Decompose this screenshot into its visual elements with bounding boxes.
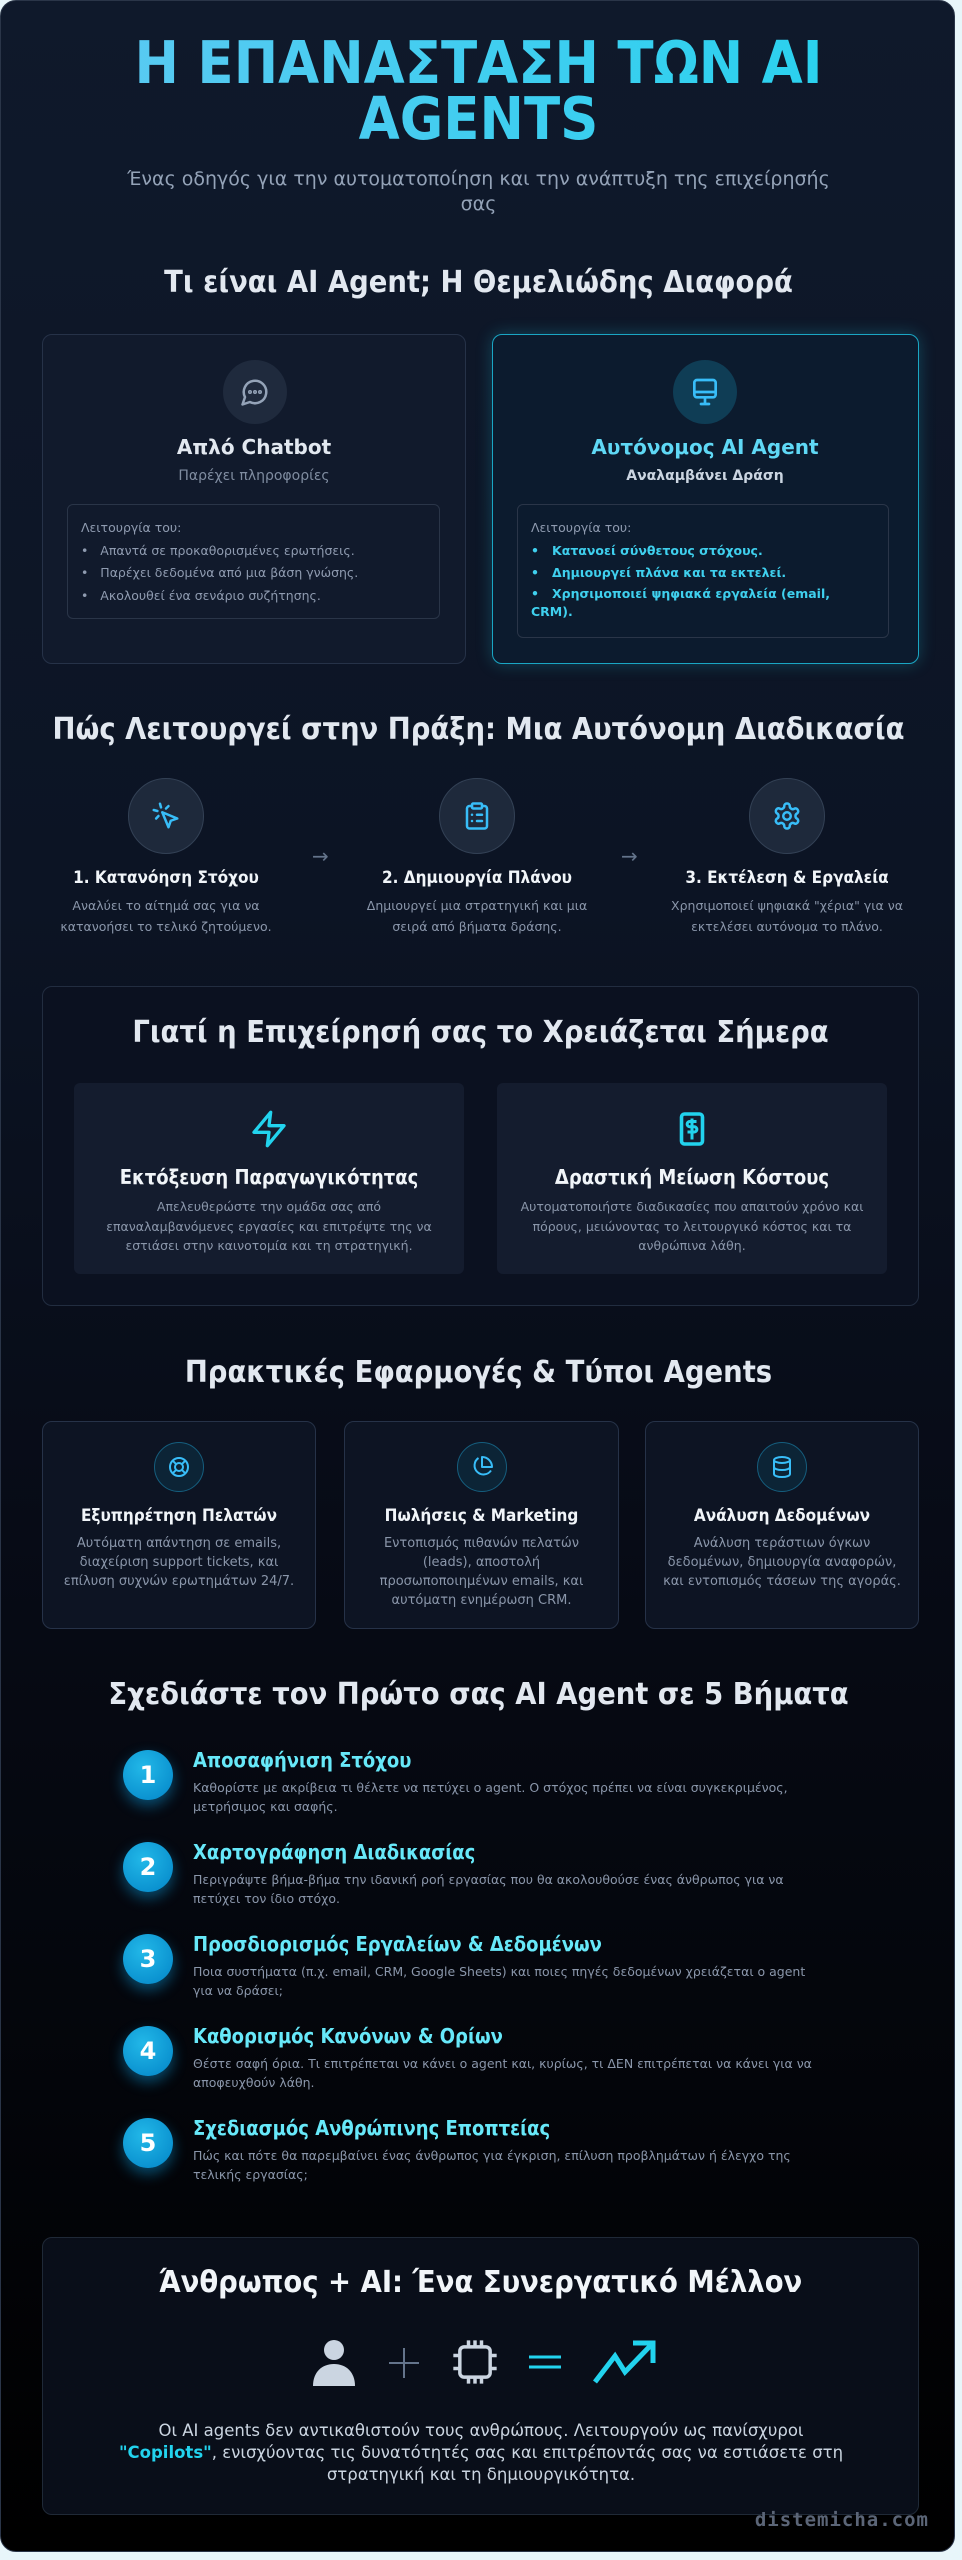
step 4: Καθορισμός Κανόνων & Ορίων	[193, 2024, 503, 2048]
icon: cursor click	[128, 778, 204, 854]
text: Εντοπισμός πιθανών πελατών (leads), αποστολή προσωποποιημένων emails, και αυτόματη ενημέρωση CRM.	[380, 1536, 583, 1608]
icon: monitor	[673, 360, 737, 424]
text: Αυτοματοποιήστε διαδικασίες που απαιτούν χρόνο και πόρους, μειώνοντας το λειτουργικό κόστος και τα ανθρώπινα λάθη.	[521, 1199, 863, 1253]
steps list	[115, 1748, 812, 2182]
functions box	[517, 504, 889, 638]
icon: equals	[529, 2356, 561, 2368]
step 5: Πώς και πότε θα παρεμβαίνει ένας άνθρωπος για έγκριση, επίλυση προβλημάτων ή έλεγχο της τελικής εργασίας;	[193, 2148, 791, 2182]
step 2	[366, 778, 587, 934]
step title: 1. Κατανόηση Στόχου	[73, 868, 259, 888]
icon: money	[680, 1112, 704, 1146]
icon: gear	[749, 778, 825, 854]
heading: Γιατί η Επιχείρησή σας το Χρειάζεται Σήμερα	[132, 1015, 829, 1050]
title: Δραστική Μείωση Κόστους	[555, 1165, 829, 1189]
closing text: Οι AI agents δεν αντικαθιστούν τους ανθρώπους. Λειτουργούν ως πανίσχυροι	[158, 2421, 804, 2440]
icon: chat	[223, 360, 287, 424]
closing text	[119, 2421, 843, 2484]
icon: plus	[389, 2348, 419, 2378]
step 5: Σχεδιασμός Ανθρώπινης Εποπτείας	[193, 2116, 550, 2140]
icon: pie chart	[457, 1442, 507, 1492]
step 3: για να δράσει;	[193, 1983, 283, 1998]
heading: Άνθρωπος + AI: Ένα Συνεργατικό Μέλλον	[159, 2265, 802, 2300]
icon: database	[757, 1442, 807, 1492]
step text: Δημιουργεί μια στρατηγική και μια σειρά από βήματα δράσης.	[367, 898, 587, 934]
card title: Αυτόνομος AI Agent	[591, 435, 819, 459]
panel: human + AI	[42, 2237, 919, 2515]
heading: applications: Πρακτικές Εφαρμογές & Τύποι Agents	[185, 1355, 772, 1390]
step 1: 1	[140, 1761, 156, 1789]
text: δεδομένων, δημιουργία αναφορών, και εντοπισμός τάσεων της αγοράς.	[663, 1555, 901, 1589]
step 2: Χαρτογράφηση Διαδικασίας	[193, 1840, 475, 1864]
subtitle: Ένας οδηγός για την αυτοματοποίηση και την ανάπτυξη της επιχείρησής σας	[127, 168, 830, 215]
step 3: Προσδιορισμός Εργαλείων & Δεδομένων	[193, 1932, 602, 1956]
closing text: στρατηγική και τη δημιουργικότητα.	[327, 2465, 635, 2484]
benefit: cost	[497, 1083, 887, 1274]
panel: autonomous AI agent	[492, 334, 919, 664]
step 3: 3	[140, 1945, 156, 1973]
icon: lifebuoy	[154, 1442, 204, 1492]
title: Εκτόξευση Παραγωγικότητας	[120, 1165, 418, 1189]
watermark: distemicha.com	[755, 2509, 929, 2531]
step 2	[115, 1840, 784, 1906]
step 2: Περιγράψτε βήμα-βήμα την ιδανική ροή εργασίας που θα ακολουθούσε ένας άνθρωπος για να πετύχει τον ίδιο στόχο.	[193, 1872, 784, 1906]
step 1	[60, 778, 272, 934]
title: Ανάλυση Δεδομένων	[694, 1506, 870, 1526]
functions box: • Ακολουθεί ένα σενάριο συζήτησης.	[81, 588, 321, 602]
icon: clipboard	[439, 778, 515, 854]
text: Αυτόματη απάντηση σε emails, διαχείριση support tickets, και επίλυση συχνών ερωτημάτων 24/7.	[64, 1536, 294, 1589]
step 5: 5	[140, 2129, 156, 2157]
text	[663, 1536, 901, 1589]
step 3	[671, 778, 903, 934]
title: Η ΕΠΑΝΑΣΤΑΣΗ ΤΩΝ AI	[135, 28, 822, 97]
step 1: Αποσαφήνιση Στόχου	[193, 1748, 411, 1772]
step 1	[115, 1748, 788, 1814]
functions box: Λειτουργία του:	[81, 520, 181, 535]
title	[1, 35, 956, 147]
icon: lightning	[252, 1110, 286, 1148]
card title: Απλό Chatbot	[177, 435, 331, 459]
equation icons	[313, 2340, 656, 2386]
panel: why your business needs it	[42, 986, 919, 1306]
step title: 2. Δημιουργία Πλάνου	[382, 868, 572, 888]
benefit: productivity	[74, 1083, 464, 1274]
title: AGENTS	[359, 84, 598, 153]
app card: sales	[344, 1421, 619, 1629]
heading: 5 steps: Σχεδιάστε τον Πρώτο σας AI Agent σε 5 Βήματα	[108, 1677, 849, 1712]
step 4: Θέστε σαφή όρια. Τι επιτρέπεται να κάνει ο agent και, κυρίως, τι ΔΕΝ επιτρέπεται να κάνει για να αποφευχθούν λάθη.	[193, 2056, 812, 2090]
text: Ανάλυση τεράστιων όγκων	[694, 1536, 870, 1551]
icon: trend up	[593, 2340, 656, 2384]
icon: person	[313, 2340, 355, 2386]
step title: 3. Εκτέλεση & Εργαλεία	[685, 868, 889, 888]
step 5	[115, 2116, 791, 2182]
functions box: • Δημιουργεί πλάνα και τα εκτελεί.	[531, 565, 786, 580]
functions box: • Απαντά σε προκαθορισμένες ερωτήσεις.	[81, 542, 355, 558]
step 2: 2	[140, 1853, 156, 1881]
step 3: Ποια συστήματα (π.χ. email, CRM, Google Sheets) και ποιες πηγές δεδομένων χρειάζεται ο agent	[193, 1964, 805, 1979]
step 3	[115, 1932, 805, 1998]
closing text: "Copilots", ενισχύοντας τις δυνατότητές σας και επιτρέποντάς σας να εστιάσετε στη	[119, 2443, 843, 2462]
title: Εξυπηρέτηση Πελατών	[81, 1506, 277, 1526]
step text: Αναλύει το αίτημά σας για να κατανοήσει το τελικό ζητούμενο.	[60, 898, 272, 934]
title: Πωλήσεις & Marketing	[385, 1506, 578, 1526]
icon: chip	[453, 2340, 497, 2384]
step 4: 4	[140, 2037, 156, 2065]
card subtitle: Αναλαμβάνει Δράση	[626, 468, 784, 484]
app card: customer service	[42, 1421, 316, 1629]
step text: Χρησιμοποιεί ψηφιακά "χέρια" για να εκτελέσει αυτόνομα το πλάνο.	[671, 898, 903, 934]
functions box	[67, 504, 440, 619]
functions box: • Χρησιμοποιεί ψηφιακά εργαλεία (email, CRM).	[531, 586, 830, 618]
functions box: • Κατανοεί σύνθετους στόχους.	[531, 542, 763, 558]
functions box: Λειτουργία του:	[531, 520, 631, 535]
app card: data analysis	[645, 1421, 919, 1629]
panel: simple chatbot	[42, 334, 466, 664]
card subtitle: Παρέχει πληροφορίες	[178, 468, 330, 484]
arrow 1: →	[312, 844, 329, 868]
text: Απελευθερώστε την ομάδα σας από επαναλαμβανόμενες εργασίες και επιτρέψτε της να εστιάσει στην καινοτομία και τη στρατηγική.	[106, 1199, 432, 1253]
step 4	[115, 2024, 812, 2090]
arrow 2: →	[621, 844, 638, 868]
step 1: Καθορίστε με ακρίβεια τι θέλετε να πετύχει ο agent. Ο στόχος πρέπει να είναι συγκεκριμένος, μετρήσιμος και σαφής.	[193, 1780, 788, 1814]
functions box: • Παρέχει δεδομένα από μια βάση γνώσης.	[81, 565, 358, 580]
heading: how it works: Πώς Λειτουργεί στην Πράξη: Μια Αυτόνομη Διαδικασία	[53, 712, 904, 747]
heading: what is AI agent: Τι είναι AI Agent; Η Θεμελιώδης Διαφορά	[164, 265, 793, 300]
